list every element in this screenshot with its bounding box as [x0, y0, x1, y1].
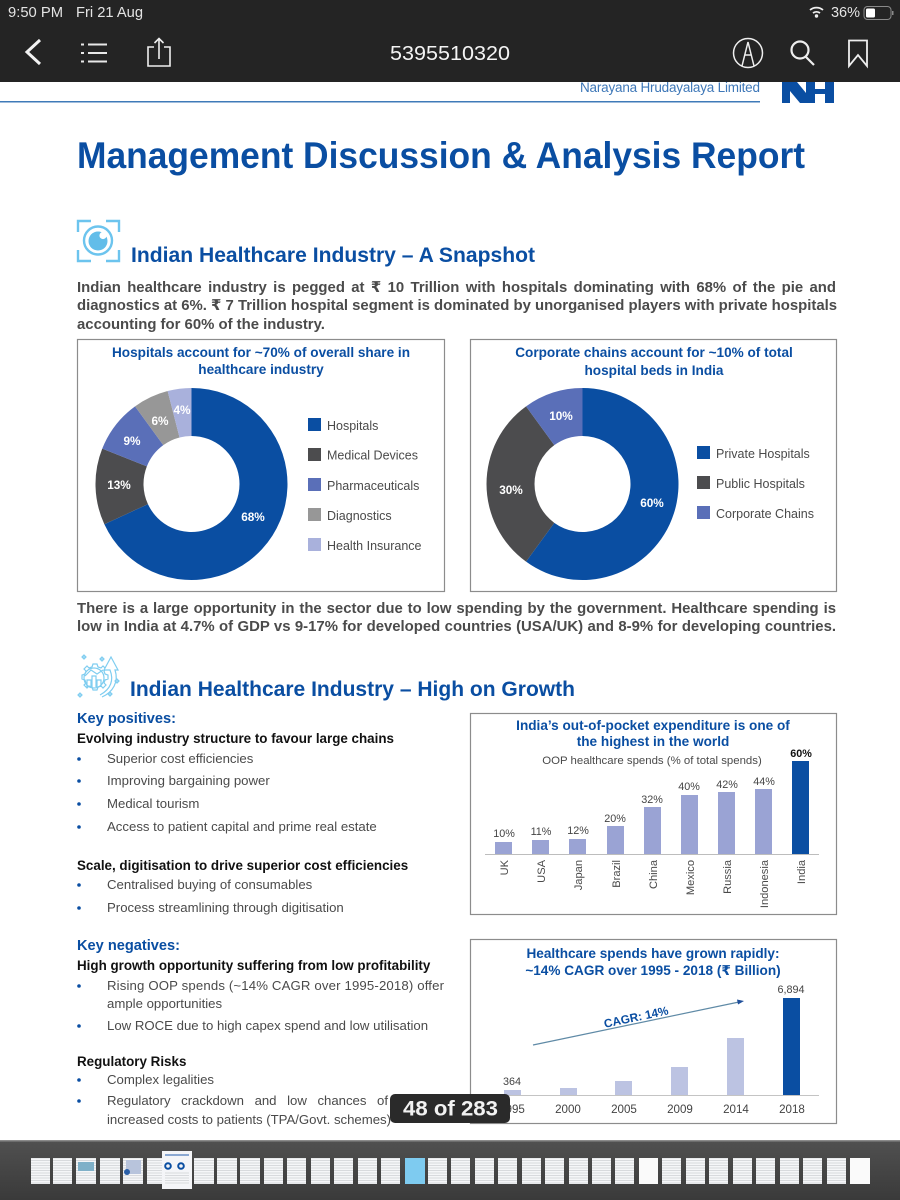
- country labels: [499, 859, 808, 908]
- panel heading: Healthcare spends have grown rapidly:: [526, 946, 780, 961]
- CAGR label: CAGR: 14%: [603, 1003, 670, 1031]
- text block: key positives: Evolving industry structure to favour large chains: [77, 731, 394, 746]
- panel heading: ~14% CAGR over 1995 - 2018 (₹ Billion): [525, 963, 781, 978]
- bullet list: large chains: [77, 751, 377, 834]
- status bar time and date: 9:50 PM: [8, 5, 63, 21]
- company name: Narayana Hrudayalaya Limited: [580, 80, 760, 95]
- bullet list: regulatory risks: increased costs to patients (TPA/Govt. schemes): [107, 1112, 391, 1127]
- panel heading: Corporate chains account for ~10% of total: [515, 345, 793, 360]
- panel heading: [112, 345, 410, 377]
- country labels: India: [796, 859, 808, 884]
- donut labels: 13%: [107, 478, 131, 492]
- opportunity paragraph: There is a large opportunity in the sector due to low spending by the government. Healthcare spending is: [77, 601, 836, 617]
- bottom thumbnail bar: [0, 1140, 900, 1200]
- bullet list: large chains: Improving bargaining power: [107, 773, 270, 788]
- text block: key negatives: High growth opportunity suffering from low profitability: [77, 958, 431, 973]
- legend: Corporate Chains: [716, 507, 814, 521]
- bullet list: large chains: Superior cost efficiencies: [107, 751, 254, 766]
- year labels: 2009: [667, 1103, 693, 1116]
- donut chart: [487, 388, 679, 580]
- year labels: [499, 1103, 805, 1116]
- panel heading: Hospitals account for ~70% of overall share in: [112, 345, 410, 360]
- text block: key negatives: Regulatory Risks: [77, 1054, 186, 1069]
- bar values: 12%: [567, 825, 589, 837]
- icon: battery: [864, 6, 894, 20]
- bullet list: large chains: Medical tourism: [107, 796, 199, 811]
- panel: healthcare spend bar chart: [470, 940, 836, 1124]
- status bar time and date: [8, 5, 143, 21]
- donut labels: 9%: [123, 434, 141, 448]
- donut labels: 68%: [241, 510, 265, 524]
- panel heading: [515, 345, 793, 378]
- donut labels: 10%: [549, 409, 573, 423]
- status bar time and date: Fri 21 Aug: [76, 5, 143, 21]
- bar values: 10%: [493, 828, 515, 840]
- page thumbnails: [31, 1158, 870, 1184]
- icon: markup pen: [734, 38, 762, 68]
- country labels: China: [648, 859, 660, 889]
- year labels: 1995: [499, 1103, 525, 1116]
- intro paragraph: diagnostics at 6%. ₹ 7 Trillion hospital segment is dominated by unorganised players with private hospitals: [77, 298, 837, 314]
- bar values: [493, 748, 812, 840]
- bar values: [503, 984, 805, 1088]
- bullet list: low profitability: ample opportunities: [107, 996, 223, 1011]
- legend: Public Hospitals: [716, 477, 805, 491]
- year labels: 2014: [723, 1103, 749, 1116]
- bullet list: cost efficiencies: [77, 877, 344, 915]
- text block: key negatives: Key negatives:: [77, 938, 180, 954]
- panel heading: India’s out-of-pocket expenditure is one of: [516, 718, 790, 733]
- legend: Hospitals: [327, 419, 378, 433]
- bullet list: regulatory risks: Complex legalities: [107, 1072, 214, 1087]
- legend: [308, 418, 422, 553]
- panel heading: [525, 946, 781, 978]
- year labels: 2005: [611, 1103, 637, 1116]
- text block: key negatives: [77, 938, 445, 1127]
- bar values: 40%: [678, 781, 700, 793]
- intro paragraph: accounting for 60% of the industry.: [77, 317, 325, 333]
- title: Management Discussion & Analysis Report: [77, 135, 805, 176]
- bullet list: cost efficiencies: Process streamlining through digitisation: [107, 900, 344, 915]
- donut labels: [499, 409, 664, 510]
- icon: wifi: [810, 8, 823, 17]
- bullet list: regulatory risks: [77, 1072, 391, 1127]
- icon: eye snapshot: [78, 221, 119, 261]
- chart subtitle: OOP healthcare spends (% of total spends): [542, 755, 762, 767]
- bullet list: low profitability: [77, 978, 445, 1033]
- legend: Health Insurance: [327, 539, 422, 553]
- text block: key positives: Scale, digitisation to drive superior cost efficiencies: [77, 858, 408, 873]
- country labels: Russia: [722, 859, 734, 894]
- donut labels: 30%: [499, 483, 523, 497]
- bar values: 6,894: [777, 984, 805, 996]
- opportunity paragraph: low in India at 4.7% of GDP vs 9-17% for developed countries (USA/UK) and 8-9% for developing countries.: [77, 619, 836, 635]
- bar values: 20%: [604, 813, 626, 825]
- bars: [504, 998, 800, 1095]
- legend: Pharmaceuticals: [327, 479, 419, 493]
- donut labels: 4%: [173, 403, 191, 417]
- donut labels: 60%: [640, 496, 664, 510]
- bars: [495, 761, 809, 854]
- year labels: 2018: [779, 1103, 805, 1116]
- intro paragraph: [77, 280, 837, 333]
- selected thumbnail: [162, 1151, 192, 1189]
- bar values: 42%: [716, 779, 738, 791]
- donut labels: [107, 403, 265, 524]
- icon: growth gear: [78, 655, 119, 697]
- year labels: 2000: [555, 1103, 581, 1116]
- arrow: CAGR trend: [533, 1000, 744, 1045]
- icon: list: [81, 44, 107, 62]
- bullet list: large chains: Access to patient capital and prime real estate: [107, 819, 377, 834]
- bar values: 60%: [790, 748, 812, 760]
- top toolbar: [0, 0, 900, 82]
- country labels: USA: [536, 859, 548, 883]
- bullet list: low profitability: Low ROCE due to high capex spend and low utilisation: [107, 1018, 428, 1033]
- battery percentage: 36%: [831, 5, 860, 21]
- bar values: 364: [503, 1076, 521, 1088]
- country labels: Indonesia: [759, 859, 771, 908]
- panel heading: the highest in the world: [577, 734, 729, 749]
- bullet list: cost efficiencies: Centralised buying of consumables: [107, 877, 313, 892]
- intro paragraph: Indian healthcare industry is pegged at ₹ 10 Trillion with hospitals dominating with 68% of the pie and: [77, 280, 836, 296]
- bar values: 11%: [531, 826, 552, 838]
- donut labels: 6%: [151, 414, 169, 428]
- icon: back chevron: [27, 40, 40, 64]
- legend: [697, 446, 814, 521]
- page header: [0, 80, 834, 103]
- legend: Diagnostics: [327, 509, 392, 523]
- panel heading: [516, 718, 790, 749]
- country labels: Brazil: [611, 860, 623, 888]
- text block: key positives: Key positives:: [77, 711, 176, 727]
- panel: hospital beds donut: [470, 340, 836, 592]
- bar values: 32%: [641, 794, 663, 806]
- donut chart: [95, 388, 287, 580]
- country labels: Japan: [573, 860, 585, 890]
- text block: key positives: [77, 711, 408, 915]
- NH logo: [782, 82, 834, 103]
- country labels: Mexico: [685, 860, 697, 895]
- legend: Medical Devices: [327, 448, 418, 462]
- icon: search: [792, 42, 814, 65]
- panel: out-of-pocket bar chart: [470, 714, 836, 914]
- heading: growth: Indian Healthcare Industry – High on Growth: [130, 677, 575, 701]
- page counter pill: 48 of 283: [403, 1098, 498, 1120]
- bullet list: regulatory risks: Regulatory crackdown and low chances of: [107, 1093, 388, 1108]
- panel heading: healthcare industry: [198, 362, 324, 377]
- legend: Private Hospitals: [716, 447, 810, 461]
- panel: hospitals share donut: [78, 340, 444, 592]
- document name: 5395510320: [390, 43, 510, 65]
- country labels: UK: [499, 859, 511, 875]
- panel heading: hospital beds in India: [585, 363, 724, 378]
- bar values: 44%: [753, 776, 775, 788]
- icon: bookmark: [849, 40, 867, 66]
- bullet list: low profitability: Rising OOP spends (~14% CAGR over 1995-2018) offer: [107, 978, 445, 993]
- opportunity paragraph: [77, 601, 836, 635]
- page counter pill: [390, 1094, 510, 1123]
- icon: share: [148, 38, 170, 66]
- heading: snapshot: Indian Healthcare Industry – A Snapshot: [131, 243, 535, 267]
